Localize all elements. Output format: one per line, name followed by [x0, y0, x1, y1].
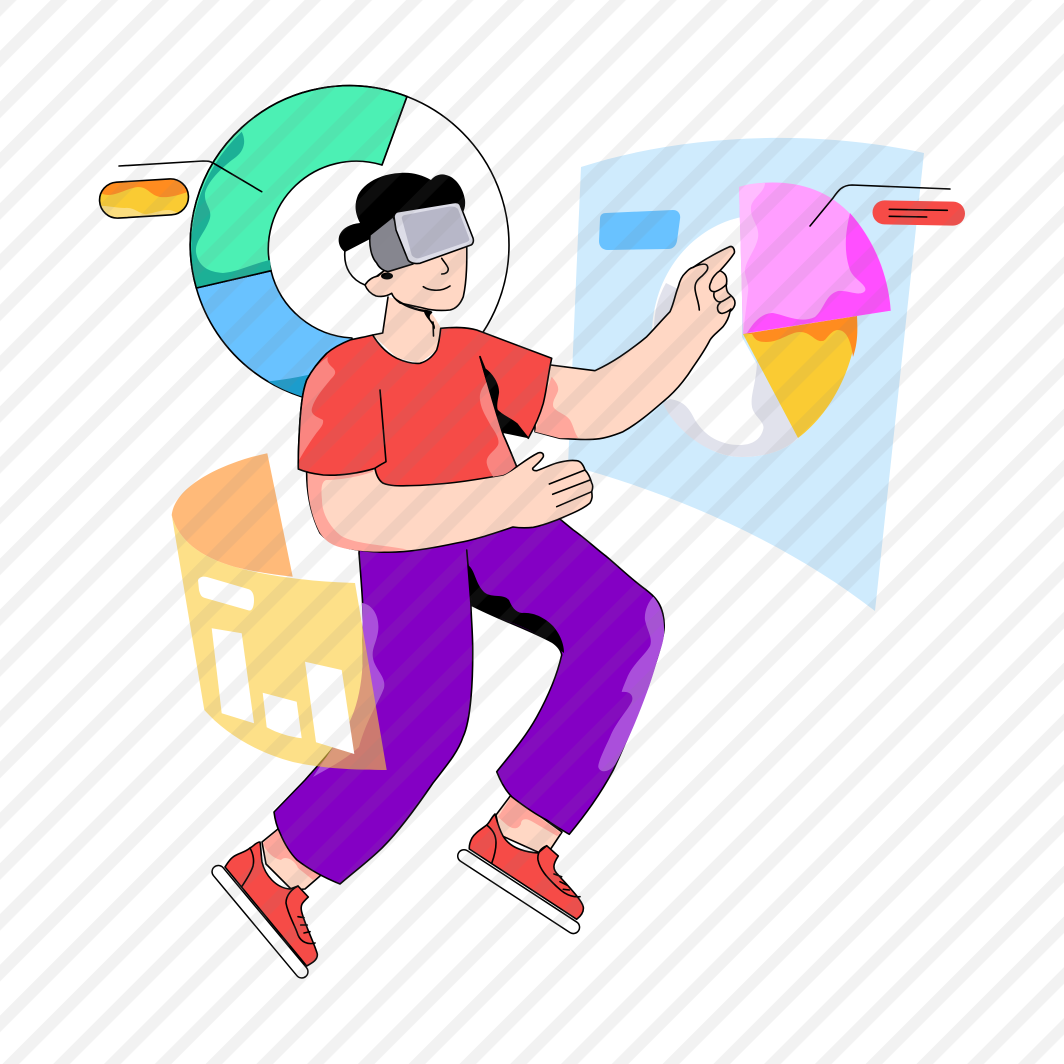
arm shade: [535, 377, 578, 438]
right foot: [464, 795, 583, 927]
pill orange wave: [102, 180, 187, 198]
vr strap: [370, 217, 413, 272]
pink pie slice: [739, 182, 891, 334]
short bar: [263, 693, 302, 738]
white chart ring: [652, 217, 798, 457]
panel: translucent bar chart sheet: [172, 453, 387, 770]
medium bar: [305, 662, 354, 754]
arm shade: [308, 468, 407, 552]
back of head: [345, 235, 385, 285]
ankle shade: [498, 797, 561, 836]
sole: [464, 856, 573, 927]
shoe: [225, 842, 317, 966]
title chip: [198, 577, 254, 611]
head: [339, 173, 473, 329]
pointing arm and hand: [535, 247, 735, 440]
donut chart: [95, 86, 509, 410]
t-shirt: [298, 327, 552, 486]
leader line to pink slice: [810, 185, 950, 226]
yellow front sheet: [172, 515, 387, 770]
trouser seam: [467, 550, 471, 605]
grey ring sliver behind hand: [654, 283, 680, 328]
green donut segment: [190, 86, 407, 288]
pill light wave: [102, 206, 178, 218]
neck: [373, 297, 441, 363]
shoe tongue: [538, 846, 580, 897]
smile: [423, 286, 450, 290]
left sleeve highlight: [298, 357, 335, 462]
panel: curved blue screen with pie chart: [568, 138, 965, 611]
left leg highlight: [313, 603, 384, 777]
laces: [242, 848, 310, 933]
ear shadow: [381, 272, 393, 280]
neck shadow: [392, 295, 435, 329]
tall bar: [212, 628, 254, 723]
magenta slice shade: [747, 213, 891, 333]
trousers: [274, 515, 664, 884]
arm: [535, 247, 735, 440]
right leg highlight: [598, 597, 664, 771]
sole: [218, 872, 302, 972]
hair: [339, 173, 465, 252]
character: [218, 173, 735, 972]
grey ring section: [663, 362, 798, 457]
left foot: [218, 829, 320, 972]
ankle: [262, 829, 320, 890]
blue donut segment: [196, 271, 352, 404]
yellow label pill: [98, 178, 190, 219]
face: [365, 240, 467, 310]
yellow pie slice: [743, 316, 857, 438]
armpit shadow: [483, 366, 528, 438]
shoe tongue: [286, 886, 315, 944]
white donut segment: [191, 86, 509, 404]
body highlight: [480, 382, 516, 477]
laces: [487, 825, 569, 890]
vr visor frame: [394, 202, 473, 264]
ankle shade: [263, 830, 320, 880]
leader line to green segment: [119, 161, 262, 192]
crotch shadow: [468, 565, 564, 653]
orange slice shade: [743, 316, 857, 357]
ankle: [496, 795, 562, 853]
shirt shape: [298, 327, 552, 486]
blue label box: [599, 210, 680, 250]
dark blue shade: [268, 374, 309, 396]
finger lines: [549, 470, 592, 507]
red label pill: [872, 200, 965, 226]
light pink slice highlight: [739, 183, 765, 334]
shirt outline and sleeve seam: [298, 353, 517, 469]
shoe: [469, 814, 583, 919]
neck skin: [373, 297, 441, 363]
pill outline: [98, 178, 190, 219]
neck outline: [373, 297, 434, 336]
bent arm and hand: [307, 453, 593, 552]
donut outline: [190, 86, 407, 288]
thumb and finger lines: [693, 264, 731, 314]
vr visor glass: [402, 206, 469, 258]
orange back fold: [172, 453, 293, 577]
blue screen sheet: [568, 138, 924, 611]
nose: [442, 258, 448, 274]
label lines: [889, 209, 947, 217]
dark green shade: [191, 132, 271, 288]
arm: [307, 453, 593, 552]
